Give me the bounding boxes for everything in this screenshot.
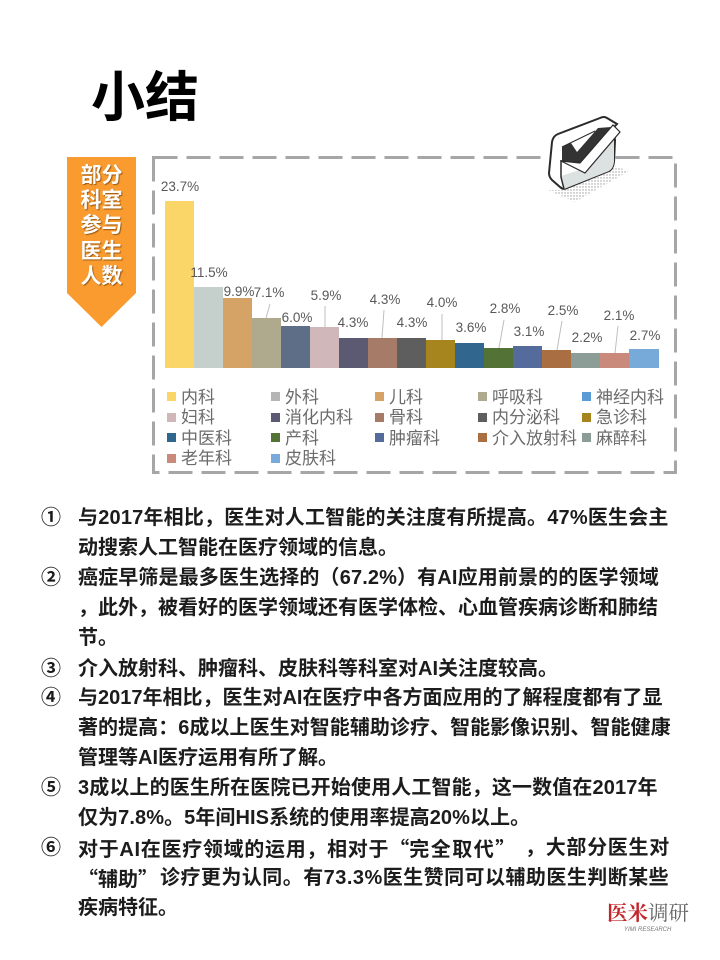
chart legend: 消化内科 [285, 408, 353, 427]
bar chart: value labels: 2.1% [604, 308, 634, 323]
chart legend: 肿瘤科 [389, 429, 440, 448]
bar chart: value labels [161, 179, 660, 345]
chart legend: 神经内科 [596, 388, 664, 407]
text block: summary item 1: ① [41, 507, 61, 529]
text block: summary item 4 [41, 686, 671, 769]
icon: checkbox [548, 116, 628, 202]
text block: summary item 5: 仅为7.8%。5年间HIS系统的使用率提高20%以上。 [78, 807, 530, 829]
panel: chart banner: 科室 [80, 189, 122, 212]
chart legend: 呼吸科 [492, 388, 543, 407]
text block: summary item 5: 3成以上的医生所在医院已开始使用人工智能，这一数值在2017年 [78, 777, 658, 799]
bar chart: value labels: 4.3% [338, 315, 368, 330]
text block: summary item 5: ⑤ [41, 777, 61, 799]
chart legend: 老年科 [181, 449, 232, 468]
text block: summary item 3: 介入放射科、肿瘤科、皮肤科等科室对AI关注度较高。 [78, 658, 558, 680]
text block: summary item 6: 疾病特征。 [78, 897, 178, 919]
text block: summary item 6: 诊疗更为认同。有73.3%医生赞同可以辅助医生判断某些 [160, 867, 669, 889]
text block: summary item 2: 节。 [78, 627, 118, 649]
text block: summary item 2 [41, 566, 659, 649]
logo: YIMI RESEARCH [624, 927, 671, 933]
text block: summary item 1 [41, 506, 669, 559]
chart legend: 中医科 [181, 429, 232, 448]
title: 小结 [91, 68, 199, 128]
text block: summary item 6: “辅助” [78, 863, 158, 892]
bar chart: value labels: 2.2% [572, 330, 602, 345]
text block: summary item 3: ③ [41, 658, 61, 680]
chart legend: 内科 [181, 388, 215, 407]
bar chart: value labels: 3.6% [456, 320, 486, 335]
text block: summary item 2: ② [41, 567, 61, 589]
text block: summary item 6: ⑥ [41, 837, 61, 859]
chart legend: 外科 [285, 388, 319, 407]
text block: summary item 4: ④ [41, 687, 61, 709]
bar chart: value labels: 2.7% [630, 328, 660, 343]
bar chart: value labels: 3.1% [514, 324, 544, 339]
bar chart: value labels: 9.9% [224, 284, 254, 299]
panel: chart banner: 人数 [80, 265, 122, 288]
bar chart: bars [165, 201, 659, 368]
bar chart: value labels: 2.8% [490, 301, 520, 316]
text block: summary item 1: 动搜索人工智能在医疗领域的信息。 [78, 537, 398, 559]
logo: 医米调研 [607, 903, 689, 925]
bar chart: leader lines [266, 304, 618, 353]
chart legend: 骨科 [389, 408, 423, 427]
text block: summary item 4: 与2017年相比，医生对AI在医疗中各方面应用的了解程度都有了显 [78, 687, 662, 709]
text block: summary item 2: ，此外，被看好的医学领域还有医学体检、心血管疾病诊断和肺结 [78, 597, 658, 619]
chart legend: 内分泌科 [492, 408, 560, 427]
bar chart: value labels: 11.5% [190, 265, 228, 280]
text block: summary item 6: ，大部分医生对 [525, 837, 670, 859]
bar chart: value labels: 5.9% [311, 288, 341, 303]
panel: chart banner: 部分 [80, 164, 122, 187]
text block: summary item 6: 对于AI在医疗领域的运用，相对于“完全取代” [78, 833, 515, 862]
bar chart: value labels: 2.5% [548, 303, 578, 318]
bar chart: value labels: 4.0% [427, 295, 457, 310]
panel: chart banner: 参与 [80, 214, 122, 237]
chart legend: 皮肤科 [285, 449, 336, 468]
bar chart: value labels: 4.3% [370, 292, 400, 307]
bar chart: value labels: 23.7% [161, 179, 199, 194]
chart legend: 妇科 [181, 408, 215, 427]
text block: summary item 4: 管理等AI医疗运用有所了解。 [78, 747, 338, 769]
text block: summary item 5 [41, 776, 658, 829]
chart legend: 产科 [285, 429, 319, 448]
bar chart: value labels: 6.0% [282, 310, 312, 325]
chart legend: 急诊科 [596, 408, 647, 427]
bar chart: value labels: 7.1% [254, 285, 284, 300]
text block: summary item 2: 癌症早筛是最多医生选择的（67.2%）有AI应用前景的的医学领域 [78, 567, 659, 589]
panel: bar chart with legend [152, 156, 677, 474]
text block: summary item 6 [41, 833, 670, 919]
chart legend: 儿科 [389, 388, 423, 407]
bar chart: value labels: 4.3% [397, 315, 427, 330]
panel: chart banner [67, 157, 136, 327]
chart legend: 介入放射科 [492, 429, 577, 448]
chart legend [167, 388, 664, 468]
text block: summary item 1: 与2017年相比，医生对人工智能的关注度有所提高。47%医生会主 [78, 507, 669, 529]
text block: summary item 4: 著的提高：6成以上医生对智能辅助诊疗、智能影像识别、智能健康 [78, 717, 671, 739]
chart legend: 麻醉科 [596, 429, 647, 448]
panel: chart banner: 医生 [80, 240, 122, 263]
